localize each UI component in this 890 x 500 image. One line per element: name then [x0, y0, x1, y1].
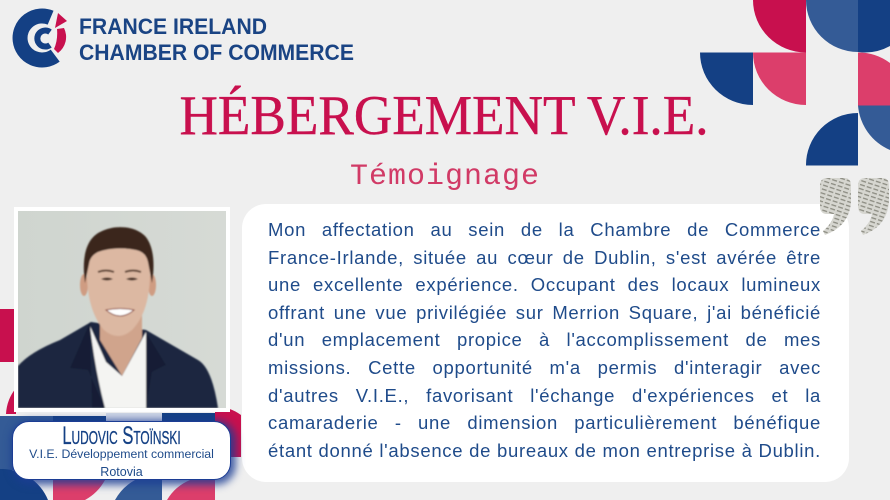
- icon: textured quotation marks: [820, 178, 889, 235]
- testimony text: étant donné l'absence de bureaux de mon entreprise à Dublin.: [268, 440, 821, 461]
- caption card: [12, 421, 231, 480]
- testimony text: d'un emplacement propice à l'accomplissement de mes: [268, 329, 821, 350]
- panel: testimony: [242, 204, 849, 482]
- icon: CCI emblem: [12, 8, 67, 68]
- company: Rotovia: [100, 465, 143, 479]
- photo frame: [14, 207, 230, 412]
- portrait illustration: [18, 211, 226, 408]
- name: Ludovic Stoïnski: [62, 422, 181, 450]
- logo: France Ireland Chamber of Commerce: [12, 8, 354, 68]
- testimony text: camaraderie - une dimension particulièrement bénéfique: [268, 412, 821, 433]
- role: V.I.E. Développement commercial: [29, 447, 214, 461]
- logo text: CHAMBER OF COMMERCE: [79, 40, 354, 64]
- testimony text: France-Irlande, située au cœur de Dublin, s'est avérée être: [268, 247, 821, 268]
- testimony text: offrant une vue privilégiée sur Merrion Square, j'ai bénéficié: [268, 302, 821, 323]
- testimony text: Mon affectation au sein de la Chambre de Commerce: [268, 219, 821, 240]
- logo text: FRANCE IRELAND: [79, 14, 267, 38]
- testimony text: missions. Cette opportunité m'a permis d'interagir avec: [268, 357, 821, 378]
- testimony text: [268, 219, 821, 461]
- testimony text: d'autres V.I.E., favorisant l'échange d'expériences et la: [268, 385, 821, 406]
- testimony text: une excellente expérience. Occupant des locaux lumineux: [268, 274, 821, 295]
- logo text: [79, 14, 354, 64]
- title: HÉBERGEMENT V.I.E.: [179, 85, 709, 147]
- subtitle: Témoignage: [350, 160, 540, 194]
